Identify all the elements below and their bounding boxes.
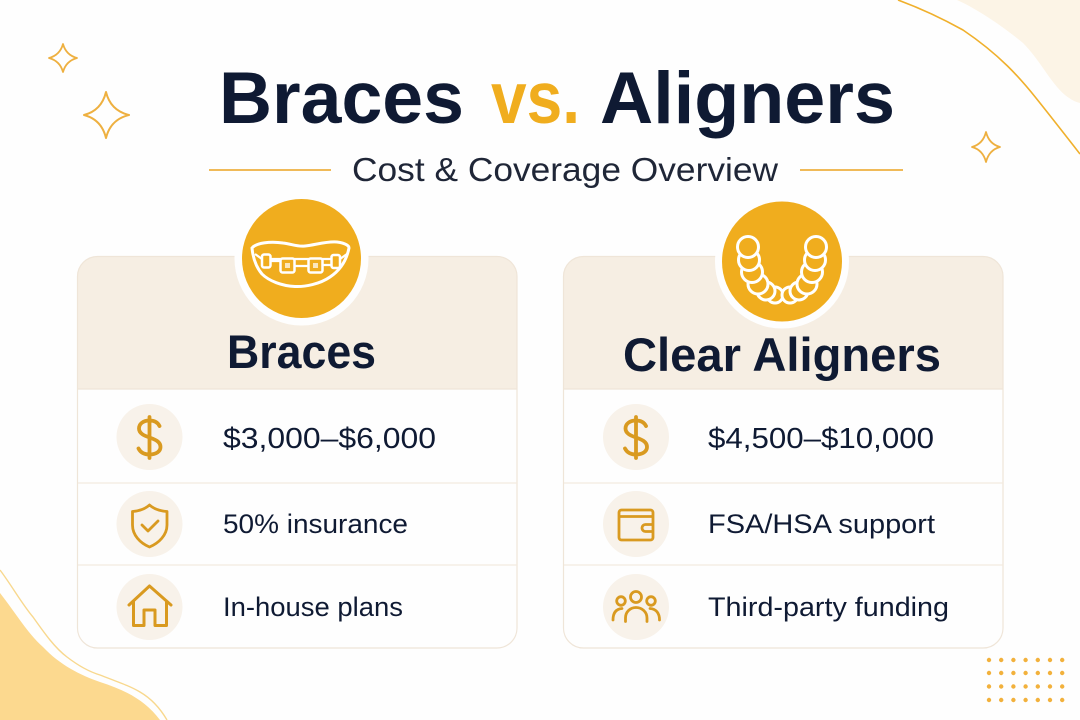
row: funding: Third-party funding bbox=[708, 592, 949, 622]
panel: clear aligners bbox=[564, 194, 1003, 648]
row: price bbox=[116, 404, 436, 470]
subtitle: Cost & Coverage Overview bbox=[352, 151, 778, 188]
title: Aligners bbox=[600, 58, 895, 139]
row: plans: In-house plans bbox=[223, 592, 403, 622]
heading: clear aligners: Clear Aligners bbox=[623, 328, 941, 381]
panel: braces bbox=[78, 192, 517, 648]
row: price: $3,000–$6,000 bbox=[223, 423, 436, 455]
row: fsa/hsa: FSA/HSA support bbox=[708, 509, 936, 539]
dot grid bbox=[987, 658, 1064, 702]
background blob: bottom left bbox=[0, 570, 167, 720]
row: insurance: 50% insurance bbox=[223, 509, 408, 539]
row: fsa/hsa bbox=[603, 491, 936, 557]
row: funding bbox=[603, 574, 949, 640]
row: insurance bbox=[116, 491, 408, 557]
title: vs. bbox=[491, 58, 580, 139]
sparkle: small top left bbox=[49, 44, 77, 72]
row: price: $4,500–$10,000 bbox=[708, 423, 934, 455]
icon: aligner tray bbox=[715, 194, 849, 328]
heading: braces: Braces bbox=[227, 325, 376, 378]
title bbox=[219, 58, 895, 139]
background blob: top right bbox=[898, 0, 1080, 154]
sparkle: right bbox=[972, 132, 1000, 162]
title: Braces bbox=[219, 58, 464, 139]
sparkle: large top left bbox=[84, 92, 129, 138]
icon: braces bbox=[234, 192, 368, 326]
row: plans bbox=[116, 574, 403, 640]
row: price bbox=[603, 404, 934, 470]
